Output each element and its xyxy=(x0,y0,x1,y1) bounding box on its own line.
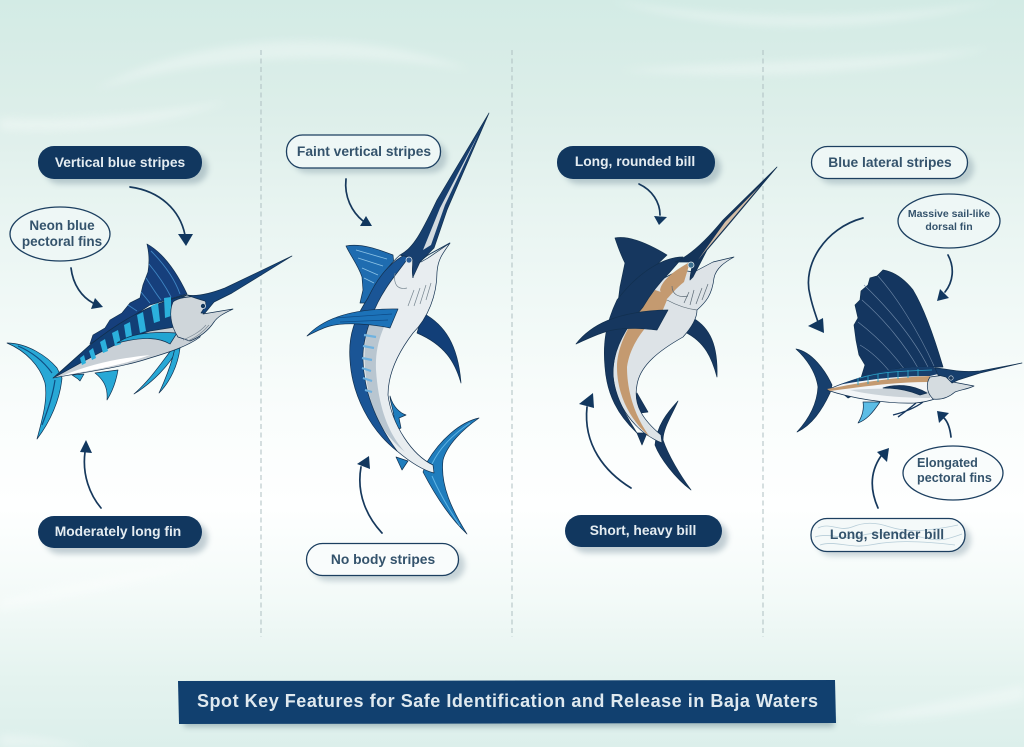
right fin xyxy=(685,318,717,377)
head xyxy=(171,296,233,341)
label: long, rounded bill: Long, rounded bill xyxy=(575,154,695,169)
tail xyxy=(655,401,691,490)
body xyxy=(351,243,450,473)
dark back with stripes xyxy=(55,295,187,377)
label: faint vertical stripes: Faint vertical stripes xyxy=(297,144,431,159)
title banner: Spot Key Features for Safe Identification and Release in Baja Waters xyxy=(197,691,818,711)
dorsal fin xyxy=(615,237,667,303)
arrow: to short heavy bill xyxy=(579,393,631,488)
label: neon blue pectoral fins: pectoral fins xyxy=(22,234,102,249)
pectoral band xyxy=(883,385,927,395)
label: neon blue pectoral fins: Neon blue xyxy=(29,218,95,233)
label: moderately long fin: Moderately long fin xyxy=(55,524,181,539)
arrow: to pectoral fins xyxy=(937,411,951,437)
sail dorsal fin xyxy=(854,270,943,378)
arrow: to no body stripes xyxy=(357,456,382,533)
label: short, heavy bill xyxy=(565,515,728,553)
body shading xyxy=(364,310,405,452)
label: massive sail-like dorsal fin xyxy=(898,194,1000,248)
dark back xyxy=(350,251,413,451)
arrow: to sail fin xyxy=(937,255,952,301)
dark back xyxy=(604,257,683,433)
label: long, slender bill xyxy=(811,518,971,556)
label: no body stripes xyxy=(306,544,465,581)
label: moderately long fin xyxy=(38,516,208,554)
label: elongated pectoral fins: Elongated xyxy=(917,456,978,470)
label: vertical blue stripes xyxy=(38,146,208,184)
label: neon blue pectoral fins xyxy=(10,207,110,261)
arrow: to pectoral fins xyxy=(71,268,103,309)
fish: blue marlin with neon fins xyxy=(7,244,292,439)
head details xyxy=(667,284,708,310)
body xyxy=(827,367,953,403)
pectoral fin xyxy=(576,310,668,344)
label: massive sail-like dorsal fin: Massive sail-like xyxy=(908,208,990,220)
label: blue lateral stripes: Blue lateral stripes xyxy=(828,155,952,170)
tail xyxy=(796,349,832,432)
right fin xyxy=(417,313,461,383)
arrow: to faint stripes xyxy=(346,179,372,226)
back band xyxy=(827,376,930,391)
dashed dividers xyxy=(261,50,763,637)
arrow: lateral stripes curve xyxy=(808,218,863,333)
fish: black marlin leaping xyxy=(576,167,777,490)
head details xyxy=(395,273,431,306)
label: faint vertical stripes xyxy=(286,135,447,173)
label: massive sail-like dorsal fin: dorsal fin xyxy=(925,221,973,233)
tail xyxy=(423,418,479,534)
fish: white marlin leaping xyxy=(307,113,489,534)
dorsal fin xyxy=(90,244,187,344)
label: blue lateral stripes xyxy=(812,146,974,184)
arrow: to stripes xyxy=(130,187,193,246)
lower fins xyxy=(858,402,880,423)
label: vertical blue stripes: Vertical blue stripes xyxy=(55,155,186,170)
tail xyxy=(7,343,62,439)
label: long, slender bill: Long, slender bill xyxy=(830,527,944,542)
label: long, rounded bill xyxy=(557,146,721,184)
title banner xyxy=(178,680,836,727)
body xyxy=(613,257,734,443)
dorsal fin xyxy=(346,245,395,303)
pectoral fin xyxy=(307,309,398,336)
belly shade xyxy=(850,389,930,398)
small fins xyxy=(390,396,406,432)
body xyxy=(53,295,205,378)
lower fins xyxy=(95,370,118,400)
head xyxy=(927,375,974,399)
bill xyxy=(187,256,292,313)
label: short, heavy bill: Short, heavy bill xyxy=(590,523,696,538)
label: elongated pectoral fins: pectoral fins xyxy=(917,471,992,485)
tan band xyxy=(617,290,667,437)
arrow: to rounded bill xyxy=(639,184,667,225)
arrow: to moderately long fin xyxy=(80,440,101,508)
bill xyxy=(400,113,489,277)
fish: sailfish xyxy=(796,270,1022,432)
bill xyxy=(675,167,777,280)
label: elongated pectoral fins xyxy=(903,446,1003,500)
label: no body stripes: No body stripes xyxy=(331,552,435,567)
pectoral fin xyxy=(117,332,177,344)
arrow: to slender bill xyxy=(872,448,889,508)
bill xyxy=(935,363,1022,383)
